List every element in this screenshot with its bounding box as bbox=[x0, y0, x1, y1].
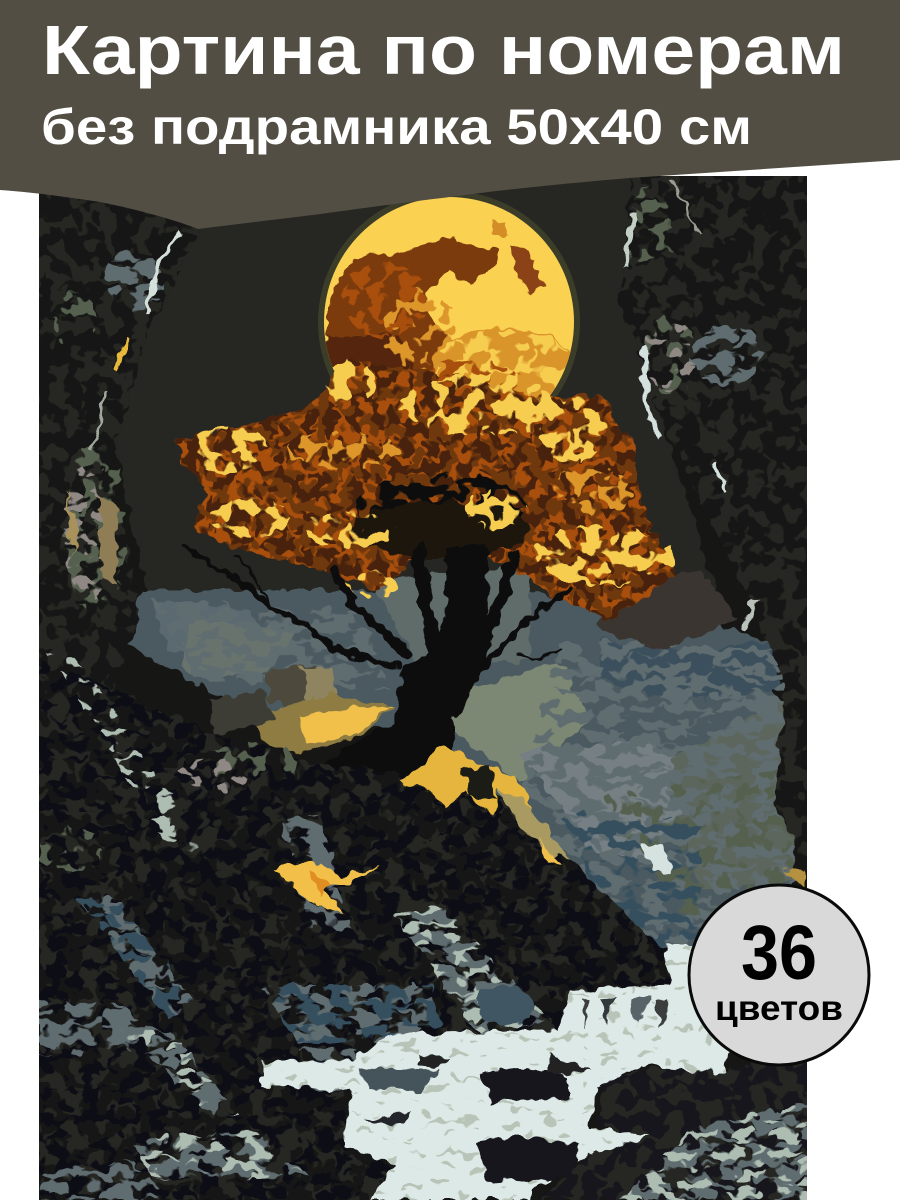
night sky bbox=[110, 170, 720, 600]
right bank rocks bbox=[540, 868, 810, 1200]
lit ledge bbox=[210, 665, 392, 755]
river bbox=[262, 843, 730, 1200]
badge number: 36 bbox=[741, 910, 817, 996]
rock streaks: grey-blue bbox=[38, 650, 550, 1200]
left cliff bbox=[39, 194, 198, 692]
tree canopy bbox=[172, 362, 678, 620]
subtitle: без подрамника 50х40 см bbox=[41, 99, 752, 155]
cloud valley bbox=[128, 566, 796, 948]
moon bbox=[318, 194, 580, 400]
tree trunk and branches bbox=[182, 545, 570, 790]
badge: 36 colours bbox=[689, 885, 869, 1065]
top banner bbox=[0, 0, 900, 229]
badge label: цветов bbox=[715, 989, 843, 1028]
golden lit rock bbox=[274, 745, 570, 915]
foreground rocks bbox=[38, 650, 690, 1200]
right cliff bbox=[620, 170, 810, 880]
title: Картина по номерам bbox=[42, 11, 845, 89]
painting: moonlit tree over river bbox=[30, 170, 810, 1200]
